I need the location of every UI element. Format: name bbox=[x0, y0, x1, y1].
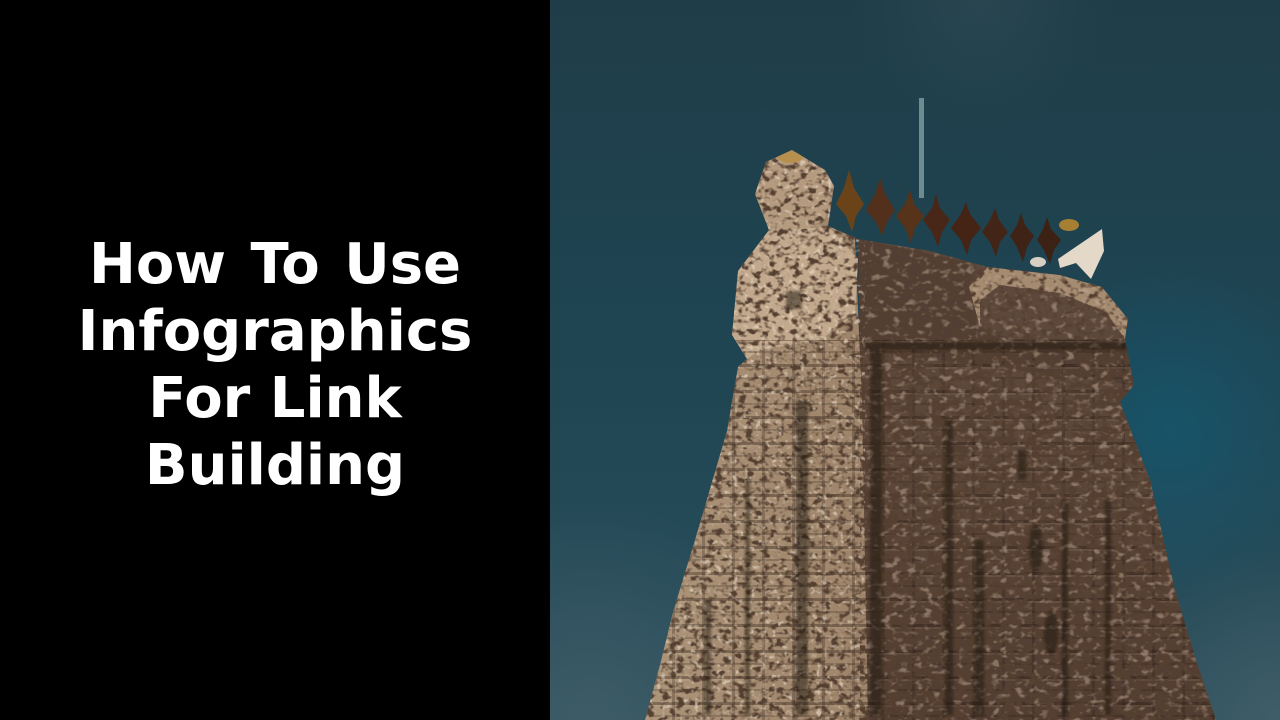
title: Infographics bbox=[78, 299, 472, 364]
row of roof finials bbox=[836, 170, 1061, 264]
carved tier pattern bbox=[640, 340, 1240, 720]
panel: black title panel bbox=[0, 0, 550, 720]
coarse dark carving texture bbox=[860, 340, 1240, 720]
white bird sculpture on roof corner bbox=[1030, 219, 1104, 279]
sky background bbox=[550, 0, 1280, 720]
title bbox=[78, 232, 472, 498]
light stone fleck texture bbox=[640, 140, 865, 720]
dark stone speckle texture bbox=[640, 140, 1240, 720]
dark vertical recesses bbox=[705, 291, 1128, 715]
medallion ornament on the left corner bbox=[732, 227, 858, 359]
warm highlights on the shaded face bbox=[865, 240, 1240, 720]
lightning rod spire bbox=[919, 98, 924, 198]
dark roof band bbox=[858, 239, 1134, 385]
sunlit left face bbox=[640, 140, 868, 720]
temple tower bbox=[640, 140, 1240, 720]
title: For Link bbox=[148, 366, 402, 431]
head ornament on the left corner bbox=[755, 150, 834, 232]
title: How To Use bbox=[89, 232, 461, 297]
panel: temple tower photograph bbox=[550, 0, 1280, 720]
shaded right face bbox=[860, 230, 1240, 720]
title: Building bbox=[145, 433, 405, 498]
golden cap on the head ornament bbox=[777, 151, 803, 163]
right roof ornament bbox=[969, 267, 1128, 339]
